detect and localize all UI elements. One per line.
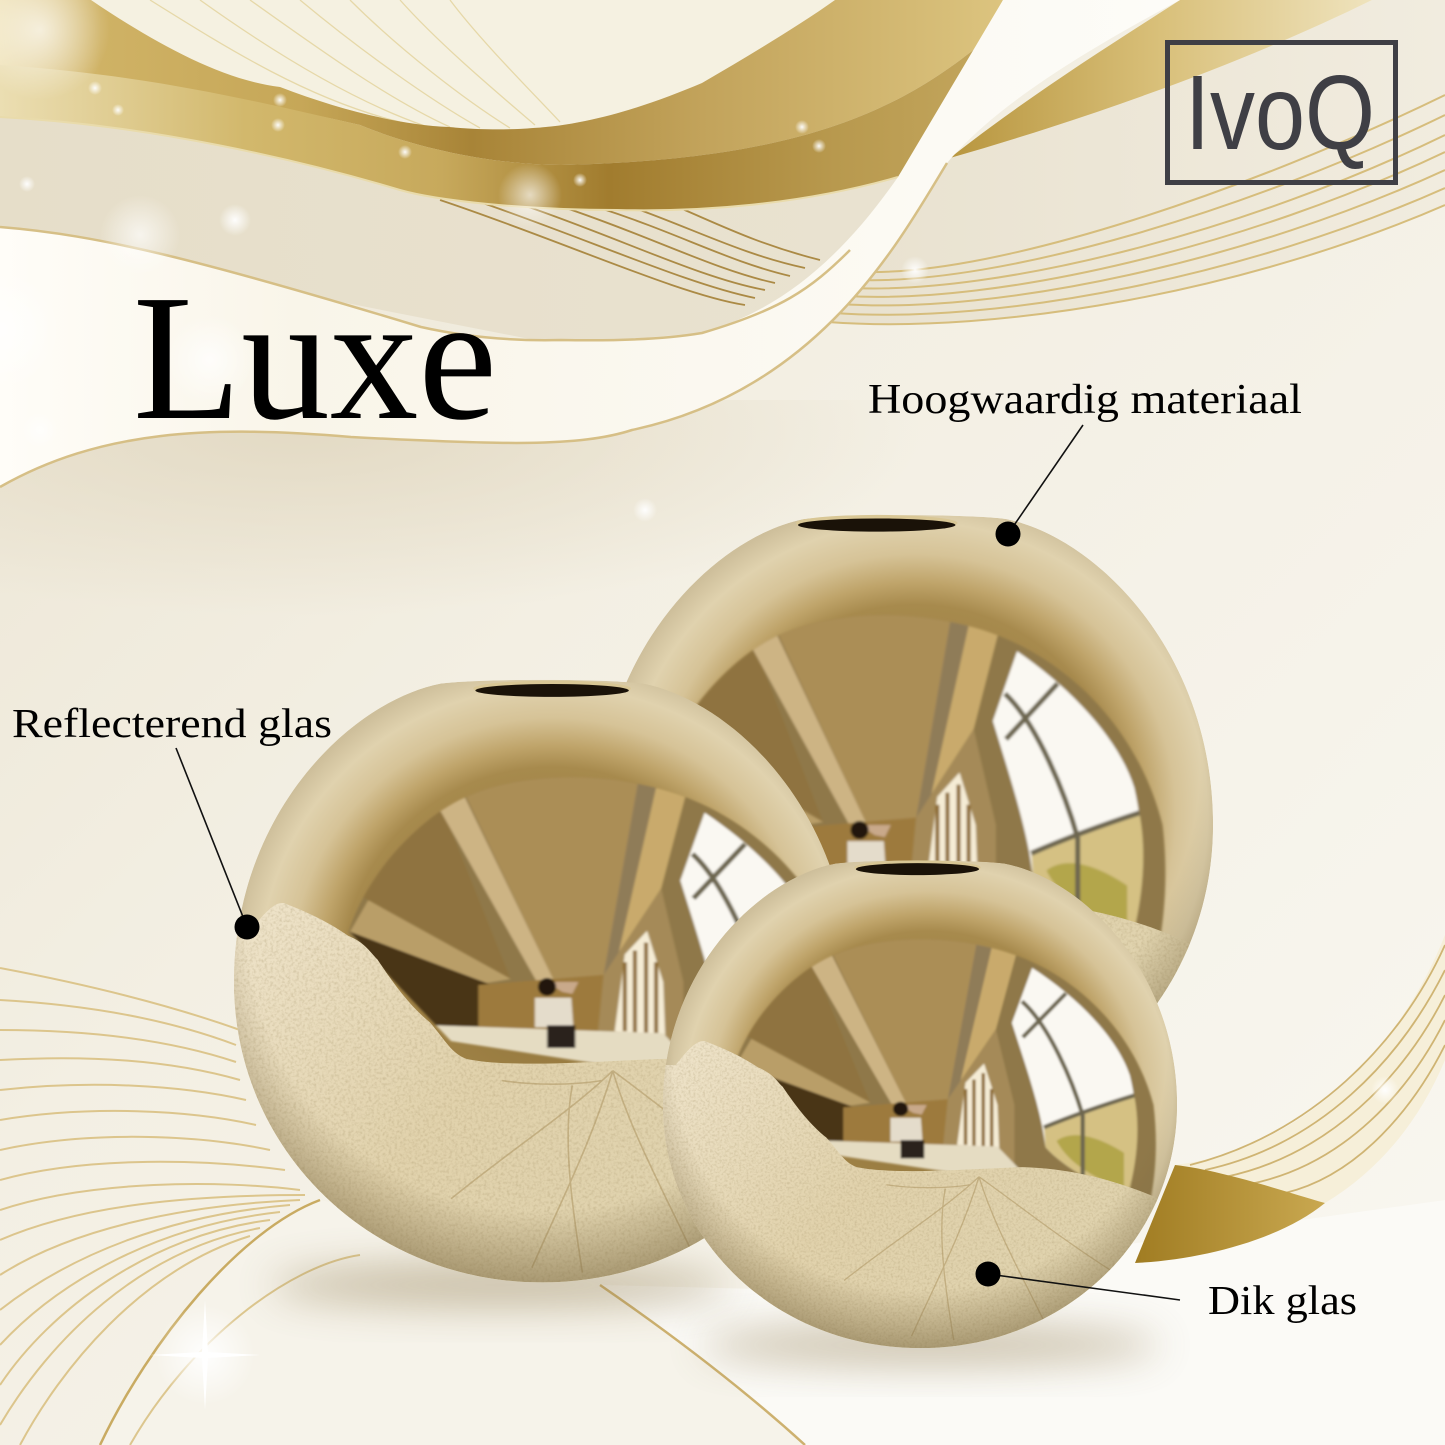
gold ribbon right <box>950 0 1372 158</box>
callout: Reflecterend glas <box>12 700 332 940</box>
white flowing ribbon <box>0 0 1180 487</box>
vase opening <box>473 681 631 697</box>
vase: medium left sphere <box>234 680 830 1282</box>
fine gold lines behind white ribbon <box>440 200 820 305</box>
shaded band between gold ribbon and white ribbon <box>0 0 1445 345</box>
bottom floor sweep <box>100 1200 1445 1445</box>
callout: Reflecterend glas: Reflecterend glas <box>12 700 332 746</box>
vase: large back sphere <box>626 514 1213 1004</box>
vase opening <box>796 515 958 532</box>
vase opening <box>854 860 981 875</box>
gold fan lines bottom left <box>0 968 305 1445</box>
callout: Dik glas: Dik glas <box>1208 1277 1357 1323</box>
title: Luxe <box>133 258 497 457</box>
thin lines on cream panel <box>150 0 560 128</box>
vase: small front sphere <box>650 860 1190 1360</box>
shaded band below white ribbon <box>0 400 1000 680</box>
callout: Hoogwaardig materiaal: Hoogwaardig materiaal <box>868 377 1302 423</box>
gold ribbon <box>0 0 1003 210</box>
callout: Hoogwaardig materiaal <box>868 377 1302 546</box>
shadows under spheres <box>270 1263 1160 1365</box>
ribbons: bottom right gold <box>1135 935 1445 1263</box>
top cream panel <box>91 0 835 129</box>
logo: IvoQ <box>1185 54 1375 172</box>
callout: Dik glas <box>976 1262 1357 1323</box>
